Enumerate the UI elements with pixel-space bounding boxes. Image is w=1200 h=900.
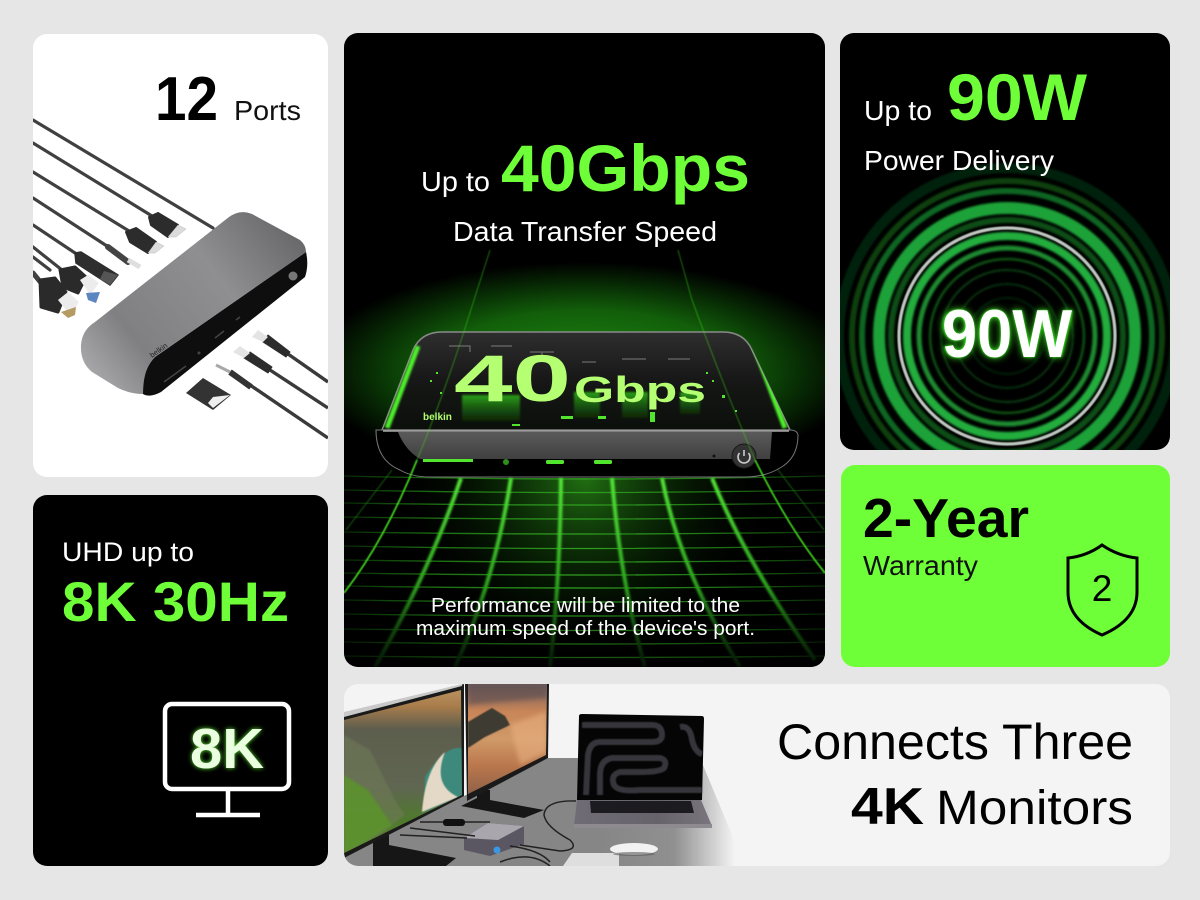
illustration: docking station: belkin [148, 341, 169, 360]
heading: 2-Year Warranty: 2-Year [863, 487, 1029, 549]
panel: three 4K monitors [344, 684, 1170, 866]
panel: 2-year warranty [841, 465, 1170, 667]
heading: Connects Three 4K Monitors: Monitors [936, 782, 1133, 835]
illustration: transparent dock with 40Gbps: 40 [454, 341, 571, 415]
heading: Up to 40Gbps [421, 131, 750, 247]
heading: Up to 40Gbps: Data Transfer Speed [453, 216, 717, 247]
background glow [344, 266, 825, 433]
heading: Connects Three 4K Monitors: Connects Three [777, 714, 1133, 770]
icon: 8K monitor [165, 704, 289, 815]
illustration: transparent dock with 40Gbps: Gbps [574, 369, 706, 410]
heading: Up to 90W Power Delivery: 90W [947, 60, 1088, 134]
heading: UHD up to 8K 30Hz: 8K 30Hz [62, 570, 289, 633]
illustration: transparent dock with 40Gbps [376, 332, 798, 477]
heading: Connects Three 4K Monitors: 4K [851, 778, 924, 836]
illustration: left cables and plugs [33, 120, 213, 318]
panel: 90W power delivery [840, 33, 1170, 450]
footnote: Performance will be limited to the [431, 595, 740, 617]
right monitor [461, 684, 549, 818]
heading: Up to 90W Power Delivery [866, 74, 1087, 176]
heading: 12 Ports [158, 76, 300, 120]
icon: power button [732, 444, 756, 468]
desk surface [344, 758, 745, 866]
glowing 90W label: 90W [942, 296, 1073, 372]
icon: shield [1068, 545, 1137, 635]
icon: shield: 2 [1092, 568, 1112, 609]
keyboard and mouse [563, 843, 658, 866]
footnote [416, 595, 755, 640]
laptop [574, 714, 712, 828]
footnote: maximum speed of the device's port. [416, 618, 755, 640]
heading: Up to 90W Power Delivery: Up to [864, 95, 932, 126]
heading: Up to 90W Power Delivery: Power Delivery [864, 145, 1054, 176]
glowing 90W label: 90W [941, 296, 1074, 372]
heading: 12 Ports: 12 [155, 65, 218, 134]
icon: 8K monitor: 8K [190, 717, 264, 781]
glowing 90W label: 90W [941, 296, 1074, 372]
illustration: docking station [81, 212, 307, 396]
heading: Up to 40Gbps: 40Gbps [501, 131, 750, 205]
illustration: glowing rings [840, 162, 1170, 450]
heading: Connects Three 4K Monitors [780, 722, 1132, 824]
light streaks [344, 250, 825, 593]
heading: UHD up to 8K 30Hz: UHD up to [62, 537, 194, 567]
heading: 12 Ports: Ports [234, 95, 301, 126]
heading: UHD up to 8K 30Hz [62, 537, 289, 633]
panel: 8K video [33, 495, 328, 866]
illustration: right cables, audio jack and SD card [186, 330, 328, 438]
panel: 12 ports [33, 34, 328, 477]
illustration: transparent dock with 40Gbps: belkin [423, 412, 452, 423]
heading: 2-Year Warranty [863, 487, 1029, 581]
heading: Up to 40Gbps: Up to [421, 166, 490, 197]
dock and cables [400, 801, 576, 866]
heading: 2-Year Warranty: Warranty [863, 550, 978, 581]
icon: 8K monitor: 8K [190, 717, 264, 781]
chart: perspective grid floor [344, 470, 825, 667]
panel: 40Gbps data transfer [310, 33, 860, 667]
left monitor [344, 684, 464, 866]
photo: desk setup [344, 684, 745, 866]
